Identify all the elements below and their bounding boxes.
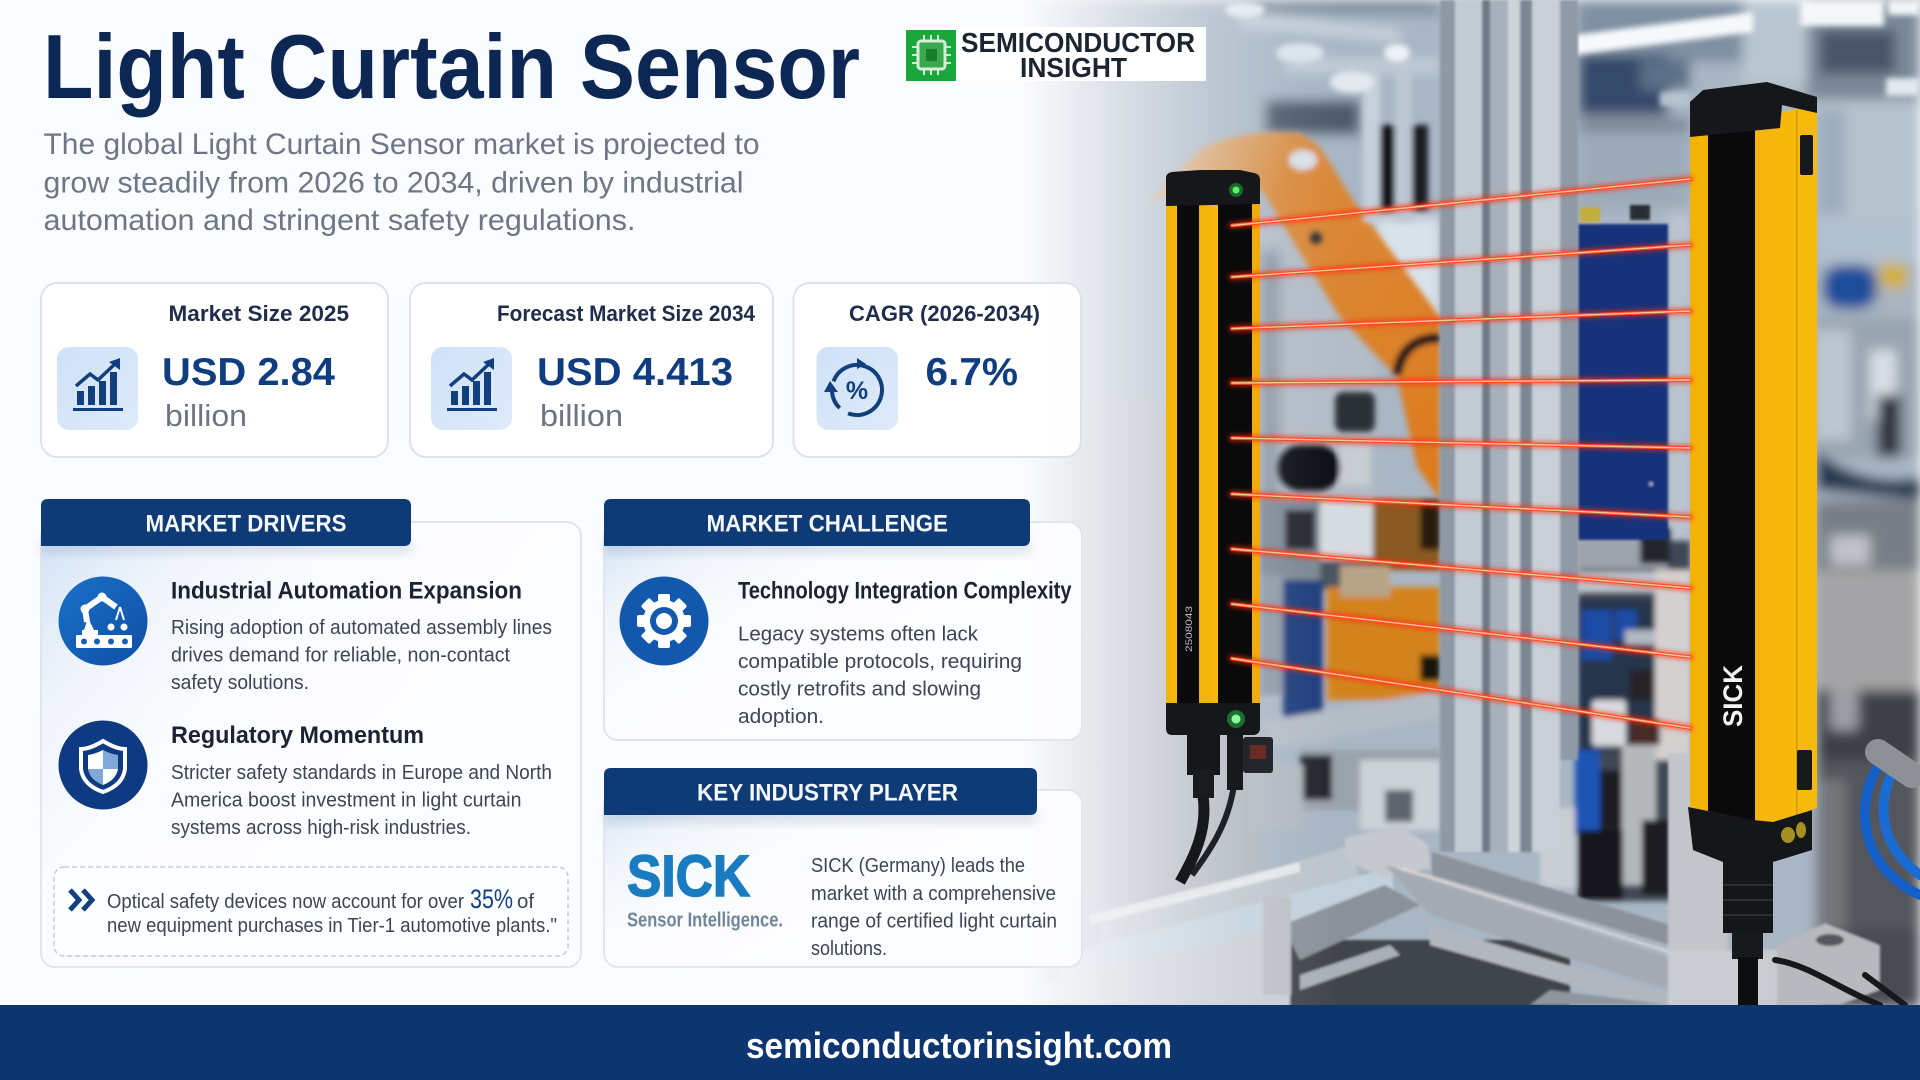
sensor serial: 2508043 <box>1184 606 1194 652</box>
player text: SICK (Germany) leads the <box>811 854 1025 877</box>
status LEDs <box>1227 183 1245 728</box>
left sensor <box>1166 170 1273 882</box>
icon: percent cycle: % <box>846 377 868 405</box>
light strips <box>1225 0 1920 106</box>
player text: market with a comprehensive <box>811 882 1056 905</box>
logo: Semiconductor Insight: SEMICONDUCTOR <box>961 27 1195 58</box>
heading bar: MARKET CHALLENGE <box>706 510 948 538</box>
left fade over photo <box>940 0 1340 1010</box>
intro paragraph: The global Light Curtain Sensor market is projected to <box>44 128 760 161</box>
stat card: CAGR <box>794 283 1081 457</box>
stat card: CAGR: CAGR (2026-2034) <box>849 301 1040 326</box>
stat card: forecast market size 2034 <box>410 283 773 457</box>
heading bar <box>604 499 1030 546</box>
icon: robot arm <box>58 576 148 666</box>
heading bar <box>41 499 411 546</box>
icon: growth chart <box>431 347 512 430</box>
beams mid <box>1232 179 1690 728</box>
logo: Semiconductor Insight <box>906 27 1206 83</box>
icon: growth chart <box>57 347 138 430</box>
driver 2 text: systems across high-risk industries. <box>171 816 471 839</box>
stat card: market size 2025: USD 2.84 <box>162 351 335 394</box>
stat card: market size 2025 <box>41 283 388 457</box>
player text: solutions. <box>811 937 887 960</box>
stat card: forecast market size 2034: billion <box>540 398 623 433</box>
beams core <box>1232 179 1690 728</box>
light beams <box>1232 179 1690 728</box>
callout quote: new equipment purchases in Tier-1 automotive plants." <box>107 914 557 937</box>
heading bar: KEY INDUSTRY PLAYER <box>697 780 958 806</box>
logo: Semiconductor Insight: INSIGHT <box>1020 52 1127 83</box>
panel: key industry player <box>604 768 1082 967</box>
beams glow <box>1232 179 1690 728</box>
stat card: market size 2025: Market Size 2025 <box>168 301 349 326</box>
callout quote: 35% <box>470 884 513 914</box>
driver 1 text: safety solutions. <box>171 671 309 694</box>
stat card: forecast market size 2034: USD 4.413 <box>537 351 733 394</box>
stat card: market size 2025: billion <box>165 398 247 433</box>
heading bar: MARKET DRIVERS <box>146 510 346 538</box>
challenge text: Technology Integration Complexity <box>738 578 1072 604</box>
SICK wordmark on sensor: SICK <box>1718 665 1748 727</box>
intro paragraph: grow steadily from 2026 to 2034, driven by industrial <box>44 166 744 200</box>
challenge text: costly retrofits and slowing <box>738 678 981 700</box>
icon: gear <box>620 576 708 666</box>
footer bar <box>0 1005 1920 1080</box>
streak highlight on left rail <box>1090 862 1300 925</box>
logo: SICK <box>627 844 783 932</box>
icon: double chevron <box>70 890 92 910</box>
intro paragraph <box>44 128 760 237</box>
conveyor rails <box>1040 753 1880 1008</box>
driver 2 text <box>171 722 552 839</box>
icon: percent cycle <box>816 347 898 430</box>
icon: shield <box>58 720 148 810</box>
intro paragraph: automation and stringent safety regulations. <box>44 204 636 237</box>
challenge text: compatible protocols, requiring <box>738 650 1022 673</box>
logo: SICK: Sensor Intelligence. <box>627 910 783 932</box>
heading bar <box>604 768 1037 815</box>
challenge text <box>738 578 1072 728</box>
right sensor <box>1688 82 1817 1011</box>
callout quote: of <box>517 890 534 913</box>
panel: market challenge <box>604 499 1082 740</box>
driver 2 text: Regulatory Momentum <box>171 722 424 749</box>
bottom right cables <box>1775 752 1920 1005</box>
stat card: CAGR: 6.7% <box>926 351 1018 394</box>
callout quote: Optical safety devices now account for over <box>107 890 464 913</box>
factory background photo <box>1000 0 1920 1010</box>
robot arm <box>1150 132 1440 500</box>
centre right machinery <box>1540 528 1690 901</box>
player text <box>811 854 1057 960</box>
title: Light Curtain Sensor <box>43 17 860 118</box>
stat card: forecast market size 2034: Forecast Market Size 2034 <box>497 301 756 326</box>
challenge text: Legacy systems often lack <box>738 622 979 646</box>
driver 1 text <box>171 578 552 694</box>
driver 1 text: Industrial Automation Expansion <box>171 578 522 604</box>
challenge text: adoption. <box>738 705 824 728</box>
logo: SICK: SICK <box>627 844 750 909</box>
driver 2 text: Stricter safety standards in Europe and North <box>171 761 552 784</box>
panel: market drivers <box>41 499 581 967</box>
driver 1 text: drives demand for reliable, non-contact <box>171 644 510 666</box>
driver 1 text: Rising adoption of automated assembly lines <box>171 616 552 639</box>
footer bar: semiconductorinsight.com <box>746 1025 1172 1066</box>
callout quote <box>54 867 568 956</box>
blue panel <box>1578 205 1668 540</box>
driver 2 text: America boost investment in light curtain <box>171 788 522 812</box>
aluminium column <box>1440 0 1578 852</box>
player text: range of certified light curtain <box>811 910 1057 932</box>
blurred machinery left of column <box>1253 72 1440 830</box>
